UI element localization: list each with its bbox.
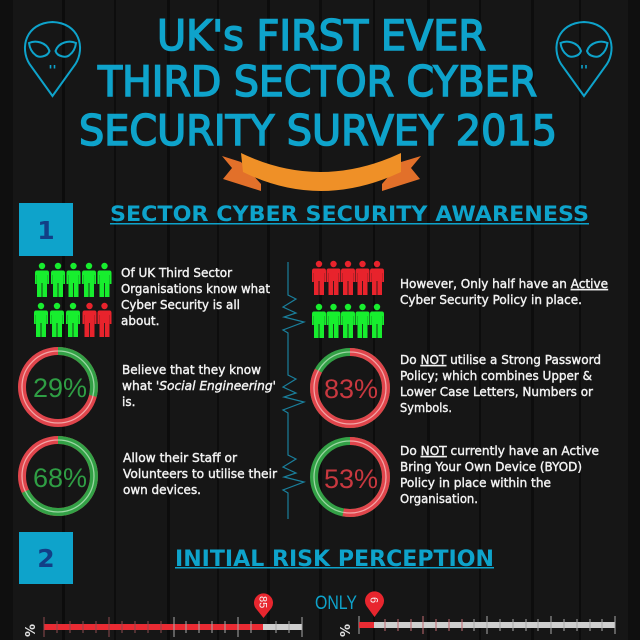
centre pulse divider [283,262,304,519]
donut: 53%: 53% [324,464,378,494]
map pin: 6: 6 [368,597,380,603]
donut: 68% [22,440,94,512]
text: strong password: Policy; which combines Upper & [400,369,592,383]
gauge: 6%: % [339,624,354,637]
text: social engineering [122,363,276,409]
map pin: 6 [365,591,384,617]
text: know what cyber security is [121,266,270,328]
text: BYOD policy: Policy in place within the [400,476,551,490]
text: active policy [400,277,608,307]
section 2 number box: 2 [37,544,55,573]
text: know what cyber security is: Organisations know what [121,282,270,296]
text: social engineering: is. [122,395,135,409]
donut: 53% [314,441,386,513]
text: strong password [400,353,601,415]
text: strong password: Lower Case Letters, Numbers or [400,385,593,399]
text: social engineering: Believe that they know [122,363,261,377]
text: BYOD policy [400,444,599,506]
icon: alien head left [25,22,80,96]
text: BYOD policy: Bring Your Own Device (BYOD) [400,460,582,474]
text: know what cyber security is: Cyber Security is all [121,298,240,312]
donut: 83%: 83% [324,374,378,404]
pictogram: half have active policy [312,261,384,338]
text: staff devices [123,451,277,497]
text: staff devices: own devices. [123,483,201,497]
text: know what cyber security is: about. [121,314,159,328]
map pin: 85 [254,593,273,618]
icon: alien head right [556,22,612,96]
text: social engineering: what 'Social Engineering' [122,379,276,393]
text: strong password: Do NOT utilise a Strong Password [400,353,601,367]
text: active policy: Cyber Security Policy in place. [400,293,582,307]
gauge: 85% [24,593,302,637]
text: active policy: However, Only half have an Active [400,277,608,291]
title: SECURITY SURVEY 2015 [79,106,557,155]
section 2 number box [19,532,73,584]
section 1 number box: 1 [37,216,55,245]
donut: 83% [314,352,386,424]
title: THIRD SECTOR CYBER [97,57,537,106]
donut: 68%: 68% [33,463,87,493]
text: know what cyber security is: Of UK Third Sector [121,266,232,280]
title [79,11,557,155]
map pin: 85: 85 [256,596,268,608]
donut: 29%: 29% [33,373,87,403]
pictogram: people know cyber security [34,263,112,337]
text: staff devices: Allow their Staff or [123,451,237,465]
section 1 heading: SECTOR CYBER SECURITY AWARENESS [110,202,589,226]
section 2 heading: INITIAL RISK PERCEPTION [175,547,494,572]
text: staff devices: Volunteers to utilise their [123,467,277,481]
text: BYOD policy: Organisation. [400,492,478,506]
gauge: 85%: % [24,624,39,637]
ribbon banner [222,153,421,191]
text: BYOD policy: Do NOT currently have an Active [400,444,599,458]
text: strong password: Symbols. [400,401,452,415]
donut: 29% [22,351,94,423]
label: only: ONLY [315,593,357,614]
section 1 number box [19,203,73,256]
title: UK's FIRST EVER [157,11,486,60]
gauge: 6% [339,591,615,637]
